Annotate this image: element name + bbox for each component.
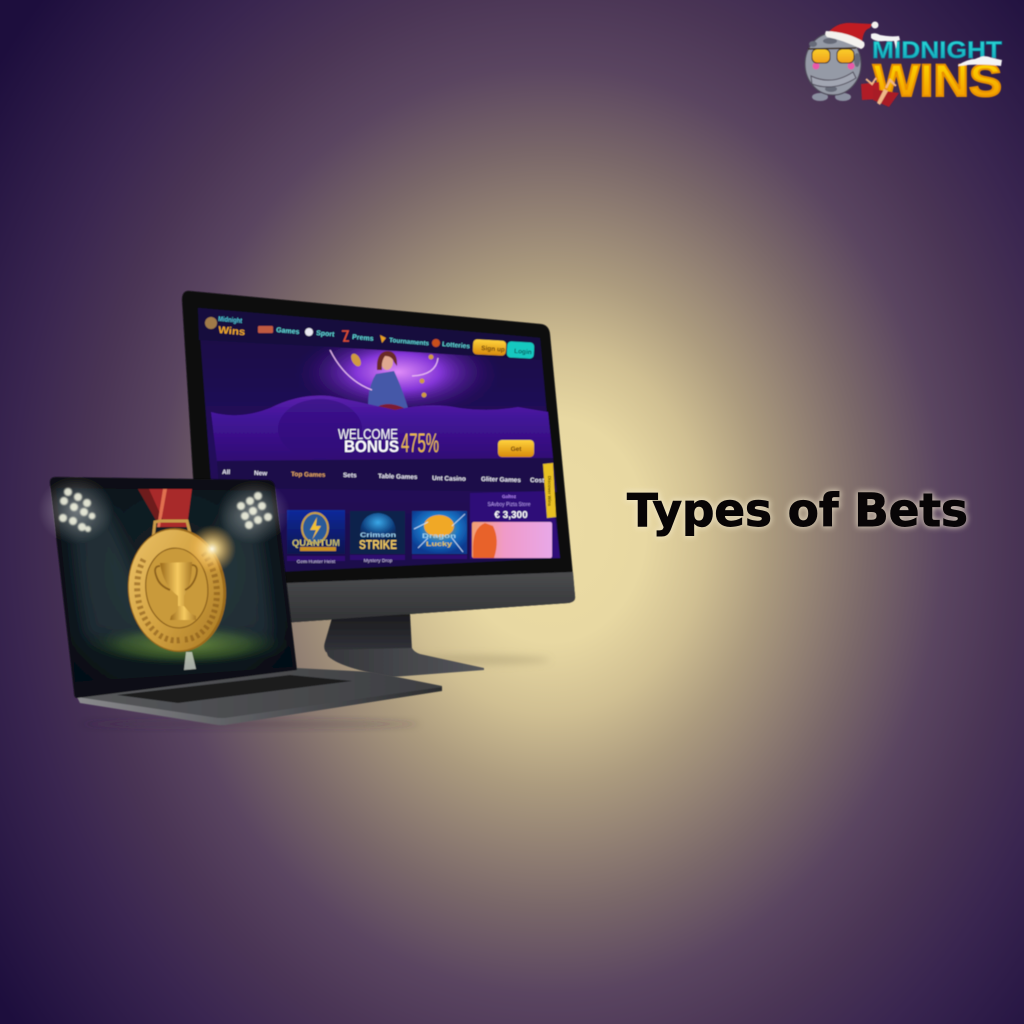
category tabs (222, 469, 545, 484)
game tile 2: STRIKE (359, 537, 397, 552)
welcome bonus text: 475% (401, 428, 439, 458)
game tile 3: Dragon (422, 533, 456, 540)
sign up button: Sign up (481, 345, 505, 354)
hero coins (349, 352, 434, 398)
login button: Login (514, 348, 532, 356)
nav items: Lotteries (442, 341, 471, 350)
logo wordmark MIDNIGHT: MIDNIGHT (872, 37, 1002, 64)
category tabs: Top Games (291, 471, 326, 479)
logo gift boxes (861, 78, 899, 107)
medal flare (188, 525, 236, 573)
logo moon mascot (805, 22, 878, 101)
medal (122, 523, 232, 657)
game tile 3: Lucky (426, 542, 453, 548)
get button (498, 440, 534, 457)
game tile 2 (350, 511, 405, 554)
light beams (68, 510, 275, 640)
welcome bonus text: WELCOME (338, 426, 398, 443)
site logo (205, 316, 246, 338)
stadium grass (80, 623, 290, 667)
category tabs: Sets (343, 472, 357, 479)
laptop base (77, 668, 442, 725)
laptop screen (56, 488, 293, 682)
pitch line (184, 652, 196, 670)
screen background (198, 308, 560, 575)
logo wordmark WINS: WINS (873, 55, 1002, 106)
welcome bonus text: BONUS (344, 437, 399, 456)
game tile 3 (412, 511, 467, 554)
tab bar (217, 458, 557, 492)
yellow side tab: Discover Wins (547, 476, 552, 507)
jackpot panel: SAvboy Pizta Store (488, 502, 531, 508)
nav items (258, 326, 471, 350)
yellow side tab (543, 463, 556, 518)
nav items: Games (276, 327, 300, 336)
monitor shadow (370, 655, 550, 665)
category tabs: Unt Casino (432, 475, 466, 483)
desktop monitor (182, 291, 575, 677)
game tile 2: Crimson (360, 532, 396, 539)
jackpot panel: Galtoz (502, 494, 517, 499)
title glow: Types of Bets (627, 484, 968, 537)
game tile 1: QUANTUM (292, 538, 340, 548)
monitor stand (324, 614, 484, 677)
jackpot panel: € 3,300 (494, 510, 528, 521)
trophy (155, 562, 197, 620)
title: Types of Bets (627, 484, 968, 537)
monitor body (182, 291, 575, 628)
sign up button (473, 339, 506, 356)
category tabs: Table Games (378, 473, 418, 481)
logo snow caps (871, 33, 1002, 66)
hero glow (293, 326, 503, 418)
nav items: Sport (316, 330, 335, 339)
category tabs: All (222, 469, 231, 476)
monitor screen (198, 308, 560, 575)
nav bar (198, 308, 541, 360)
medal loop (153, 521, 190, 539)
login button (507, 341, 534, 359)
hero character (368, 351, 408, 412)
logo (805, 22, 1002, 107)
laptop (38, 476, 442, 727)
category tabs: Gliter Games (481, 476, 521, 484)
monitor chin (204, 572, 575, 628)
get button: Get (511, 446, 522, 453)
wave blob (278, 399, 362, 459)
laptop shadow (80, 721, 420, 727)
game captions: Mystery Drop (364, 558, 393, 564)
wave panel (211, 396, 553, 462)
site logo: Midnight (218, 316, 243, 325)
hero ribbons (330, 350, 438, 390)
floodlight right (218, 480, 290, 544)
game tile 1 (287, 510, 345, 554)
nav items: Tournaments (389, 337, 430, 348)
welcome bonus text (338, 426, 439, 458)
game captions (287, 555, 467, 565)
jackpot panel (470, 491, 560, 559)
laptop lid (50, 477, 297, 698)
site logo: Wins (218, 325, 246, 338)
game captions: Gem Hunter Heist (297, 559, 336, 565)
nav items: Prems (352, 334, 374, 343)
laptop keyboard (117, 675, 352, 703)
medal ribbon (138, 489, 192, 527)
category tabs: Cost (530, 477, 545, 484)
category tabs: New (254, 470, 267, 477)
floodlight left (38, 476, 114, 544)
